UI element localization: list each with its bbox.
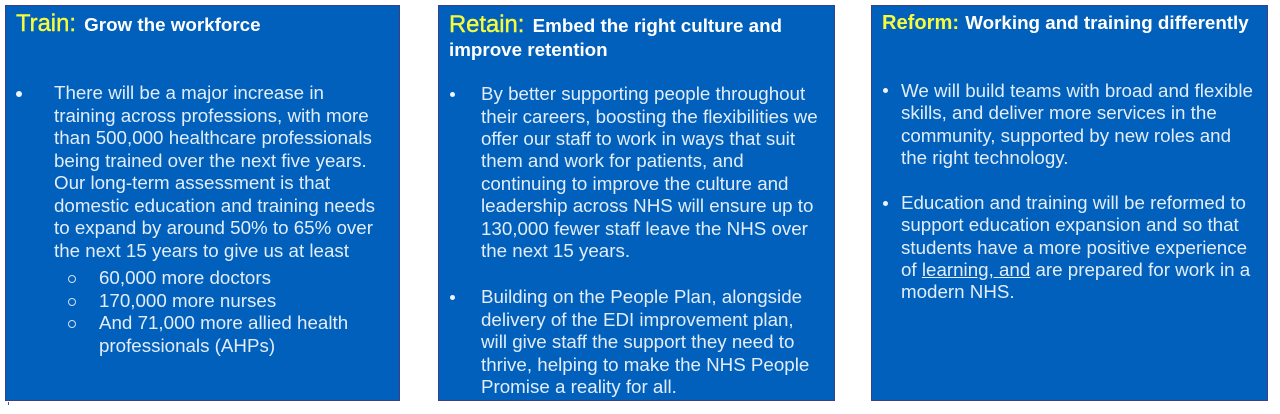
text block: retain bullet 2: Building on the People Plan, alongside xyxy=(481,286,802,307)
text block: retain bullet 2: Promise a reality for all. xyxy=(481,376,677,397)
text block: train bullet: to expand by around 50% to 65% over xyxy=(54,217,373,238)
text block: reform bullet 2: students have a more positive experience xyxy=(901,237,1247,258)
text block: train bullet xyxy=(16,82,375,261)
text block: train bullet: There will be a major increase in xyxy=(54,82,324,103)
panel: train xyxy=(5,5,400,401)
list: workforce numbers: And 71,000 more allied health xyxy=(99,312,348,333)
heading: reform: Reform: Working and training differently xyxy=(882,12,1249,34)
text block: retain bullet 1: By better supporting people throughout xyxy=(481,83,805,104)
text block: train bullet: Our long-term assessment is that xyxy=(54,172,330,193)
text block: retain bullet 1: 130,000 fewer staff leave the NHS over xyxy=(481,218,808,239)
text block: retain bullet 1: their careers, boosting the flexibilities we xyxy=(481,106,818,127)
panel: reform xyxy=(871,5,1268,401)
text block: retain bullet 2: will give staff the support they need to xyxy=(481,331,794,352)
text block: reform bullet 2: support education expansion and so that xyxy=(901,214,1239,235)
heading: retain: improve retention xyxy=(449,39,608,60)
text block: train bullet: the next 15 years to give us at least xyxy=(54,240,349,261)
text block: reform bullet 2: Education and training will be reformed to xyxy=(901,192,1246,213)
list: workforce numbers: 60,000 more doctors xyxy=(99,267,271,288)
text block: retain bullet 1: leadership across NHS will ensure up to xyxy=(481,195,813,216)
list: workforce numbers: 170,000 more nurses xyxy=(99,290,276,311)
text block: reform bullet 1: skills, and deliver more services in the xyxy=(901,102,1217,123)
heading: retain: Retain: Embed the right culture and xyxy=(449,11,782,38)
text block: reform bullet 1 xyxy=(883,80,1253,168)
text block: train bullet: domestic education and training needs xyxy=(54,195,375,216)
text block: reform bullet 1: We will build teams with broad and flexible xyxy=(901,80,1253,101)
text block: reform bullet 2 xyxy=(883,192,1250,302)
list: workforce numbers xyxy=(68,267,348,356)
text block: retain bullet 1 xyxy=(450,83,818,261)
text block: reform bullet 1: community, supported by new roles and xyxy=(901,125,1231,146)
panel: retain xyxy=(438,5,835,401)
text block: train bullet: training across professions, with more xyxy=(54,105,369,126)
heading: train: Train: Grow the workforce xyxy=(16,10,261,37)
text block: retain bullet 2: thrive, helping to make the NHS People xyxy=(481,354,809,375)
text block: reform bullet 1: the right technology. xyxy=(901,147,1068,168)
text block: train bullet: than 500,000 healthcare professionals xyxy=(54,127,372,148)
text block: retain bullet 1: them and work for patients, and xyxy=(481,150,744,171)
text block: retain bullet 2: delivery of the EDI improvement plan, xyxy=(481,309,794,330)
list: workforce numbers: professionals (AHPs) xyxy=(99,335,275,356)
tick mark below train panel xyxy=(8,402,9,405)
text block: retain bullet 2 xyxy=(450,286,809,397)
heading: retain xyxy=(449,11,782,60)
text block: reform bullet 2: of learning, and are prepared for work in a xyxy=(901,259,1250,280)
text block: retain bullet 1: the next 15 years. xyxy=(481,240,630,261)
text block: retain bullet 1: continuing to improve the culture and xyxy=(481,173,788,194)
text block: retain bullet 1: offer our staff to work in ways that suit xyxy=(481,128,795,149)
text block: reform bullet 2: modern NHS. xyxy=(901,281,1015,302)
text block: train bullet: being trained over the next five years. xyxy=(54,150,367,171)
